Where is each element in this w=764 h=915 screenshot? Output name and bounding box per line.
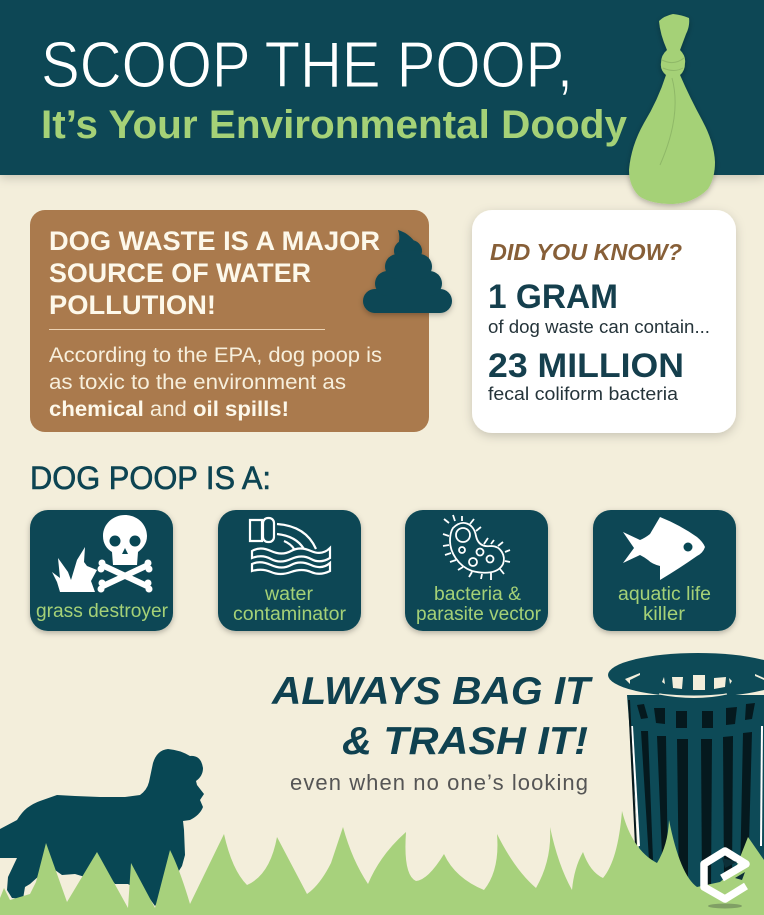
label: bacteria & [434, 584, 521, 605]
heading: DOG WASTE IS A MAJOR [49, 226, 380, 256]
icon: pipe over water [250, 518, 330, 574]
label: water [264, 584, 314, 605]
icon: trash can [608, 653, 764, 890]
label: contaminator [233, 604, 347, 625]
heading [49, 226, 380, 320]
label: killer [643, 604, 686, 625]
icon: tied green bag [629, 14, 715, 204]
label: parasite vector [416, 604, 542, 625]
body text: chemical and oil spills! [49, 398, 289, 421]
did you know heading: DID YOU KNOW? [490, 239, 682, 265]
icon: skull and crossbones [98, 515, 152, 592]
card: aquatic life killer [593, 510, 736, 631]
logo: hexagon e mark [704, 851, 746, 908]
icon: poop pile [363, 230, 452, 313]
icon: bacterium [443, 515, 510, 580]
subtitle: It’s Your Environmental Doody [41, 103, 628, 147]
body text: as toxic to the environment as [49, 371, 346, 394]
callout: always bag it [271, 670, 593, 795]
stat: 23 million: 23 MILLION [488, 347, 684, 385]
title: SCOOP THE POOP, [41, 28, 573, 101]
tagline: even when no one’s looking [290, 770, 588, 795]
grass [0, 811, 764, 915]
stat: 1 gram: of dog waste can contain... [488, 316, 710, 337]
stat: 1 gram: 1 GRAM [488, 278, 618, 316]
heading: dog poop is a: DOG POOP IS A: [30, 460, 271, 496]
body text: According to the EPA, dog poop is [49, 344, 382, 367]
stat: 23 million [488, 347, 684, 404]
callout: always bag it: ALWAYS BAG IT [271, 670, 593, 713]
label [416, 584, 542, 625]
panel: water pollution [30, 210, 429, 432]
label [618, 584, 711, 625]
label: aquatic life [618, 584, 711, 605]
stat: 1 gram [488, 278, 710, 337]
body text [49, 344, 382, 421]
card: bacteria and parasite vector [405, 510, 548, 631]
icon: grass [52, 547, 97, 592]
card: water contaminator [218, 510, 361, 631]
callout: always bag it: & TRASH IT! [342, 720, 588, 763]
heading: POLLUTION! [49, 290, 216, 320]
stat: 23 million: fecal coliform bacteria [488, 383, 679, 404]
icon: dog silhouette [0, 749, 204, 906]
icon: fish [623, 517, 705, 580]
label [233, 584, 347, 625]
panel: did you know [472, 210, 736, 433]
header banner [0, 0, 764, 175]
card: grass destroyer [30, 510, 173, 631]
label: grass destroyer [36, 601, 169, 622]
heading: SOURCE OF WATER [49, 258, 311, 288]
